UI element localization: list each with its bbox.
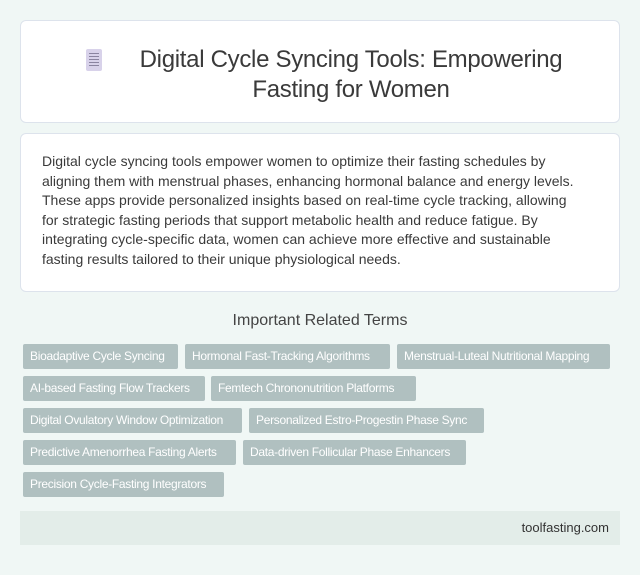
tags: Menstrual-Luteal Nutritional Mapping <box>404 349 589 363</box>
tags: Predictive Amenorrhea Fasting Alerts <box>30 445 217 459</box>
title: Digital Cycle Syncing Tools: Empowering Fasting for Women <box>140 46 562 103</box>
heading: related terms: Important Related Terms <box>233 312 407 329</box>
footer text: toolfasting.com <box>522 520 609 535</box>
tags: Personalized Estro-Progestin Phase Sync <box>256 413 467 427</box>
tags: Data-driven Follicular Phase Enhancers <box>250 445 450 459</box>
description text: Digital cycle syncing tools empower women to optimize their fasting schedules by aligning them with menstrual phases, enhancing hormonal balance and energy levels. These apps provide personalized insights based on real-time cycle tracking, allowing for strategic fasting periods that support metabolic health and reduce fatigue. By integrating cycle-specific data, women can achieve more effective and sustainable fasting results tailored to their unique physiological needs. <box>42 153 574 267</box>
tags: Digital Ovulatory Window Optimization <box>30 413 223 427</box>
tags: AI-based Fasting Flow Trackers <box>30 381 190 395</box>
footer <box>20 511 620 545</box>
tags: Precision Cycle-Fasting Integrators <box>30 477 206 491</box>
icon: document <box>86 49 102 71</box>
title card <box>20 20 620 123</box>
tags: Bioadaptive Cycle Syncing <box>30 349 165 363</box>
tags: Hormonal Fast-Tracking Algorithms <box>192 349 370 363</box>
description card <box>20 133 620 292</box>
tags: Femtech Chrononutrition Platforms <box>218 381 394 395</box>
